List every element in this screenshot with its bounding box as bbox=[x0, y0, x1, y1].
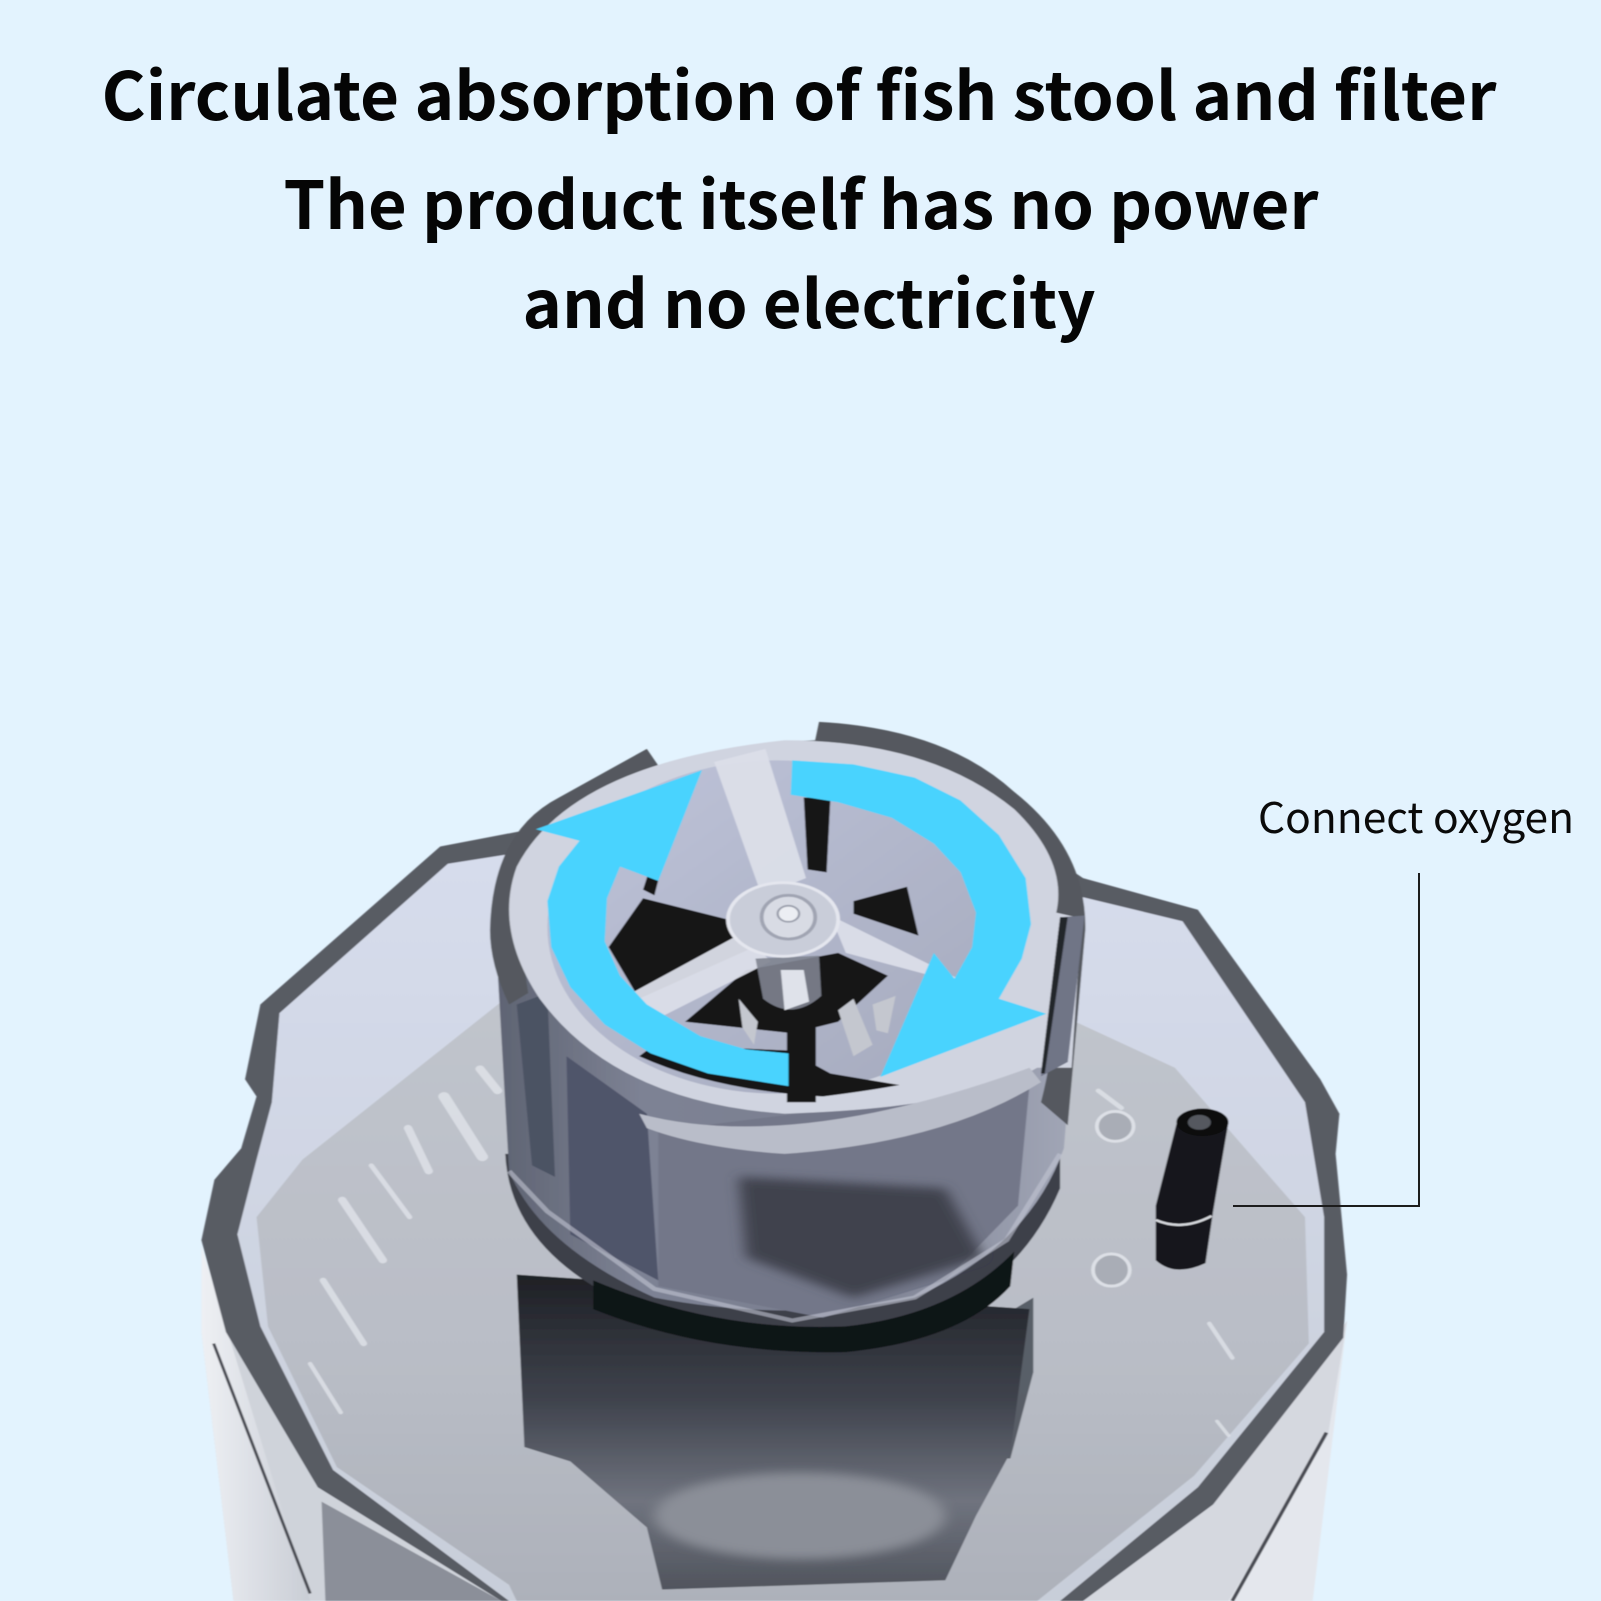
title: The product itself has no power bbox=[284, 153, 1319, 249]
cup rim with tabs bbox=[490, 722, 1085, 1125]
lower front dark pane bbox=[322, 1502, 501, 1601]
three-arm spider spokes bbox=[632, 749, 999, 1022]
floor slots bbox=[310, 1069, 1232, 1435]
spider hub bbox=[728, 883, 838, 1010]
blue rotation arrow right bbox=[791, 760, 1046, 1077]
impeller silver fins bbox=[739, 996, 896, 1056]
air connector tube bbox=[1156, 1109, 1228, 1270]
impeller black blades bbox=[609, 798, 919, 1102]
cup right edge pane bbox=[1041, 915, 1085, 1076]
mounting holes bbox=[1093, 1111, 1134, 1286]
lid floor bbox=[257, 1002, 1309, 1601]
cup body front pane bbox=[658, 1085, 1029, 1318]
lid outer rim bbox=[201, 786, 1347, 1601]
product photo: filter seen from above bbox=[201, 722, 1347, 1601]
white filter body sides bbox=[201, 1246, 1347, 1601]
blue rotation arrow left bbox=[536, 770, 788, 1086]
title: and no electricity bbox=[522, 252, 1096, 348]
title bbox=[102, 44, 1497, 348]
title: Circulate absorption of fish stool and filter bbox=[102, 44, 1497, 140]
cup collar dark band bbox=[505, 1148, 1060, 1341]
callout: connect oxygen bbox=[1233, 785, 1574, 1206]
cup body cylinder bbox=[495, 930, 1082, 1311]
lid glass wall bbox=[237, 851, 1324, 1601]
callout: connect oxygen: Connect oxygen bbox=[1258, 785, 1574, 846]
cup inner well bbox=[547, 760, 1007, 1094]
cup front lip bbox=[639, 1068, 1041, 1154]
lower dark reservoir bbox=[517, 1275, 1033, 1589]
